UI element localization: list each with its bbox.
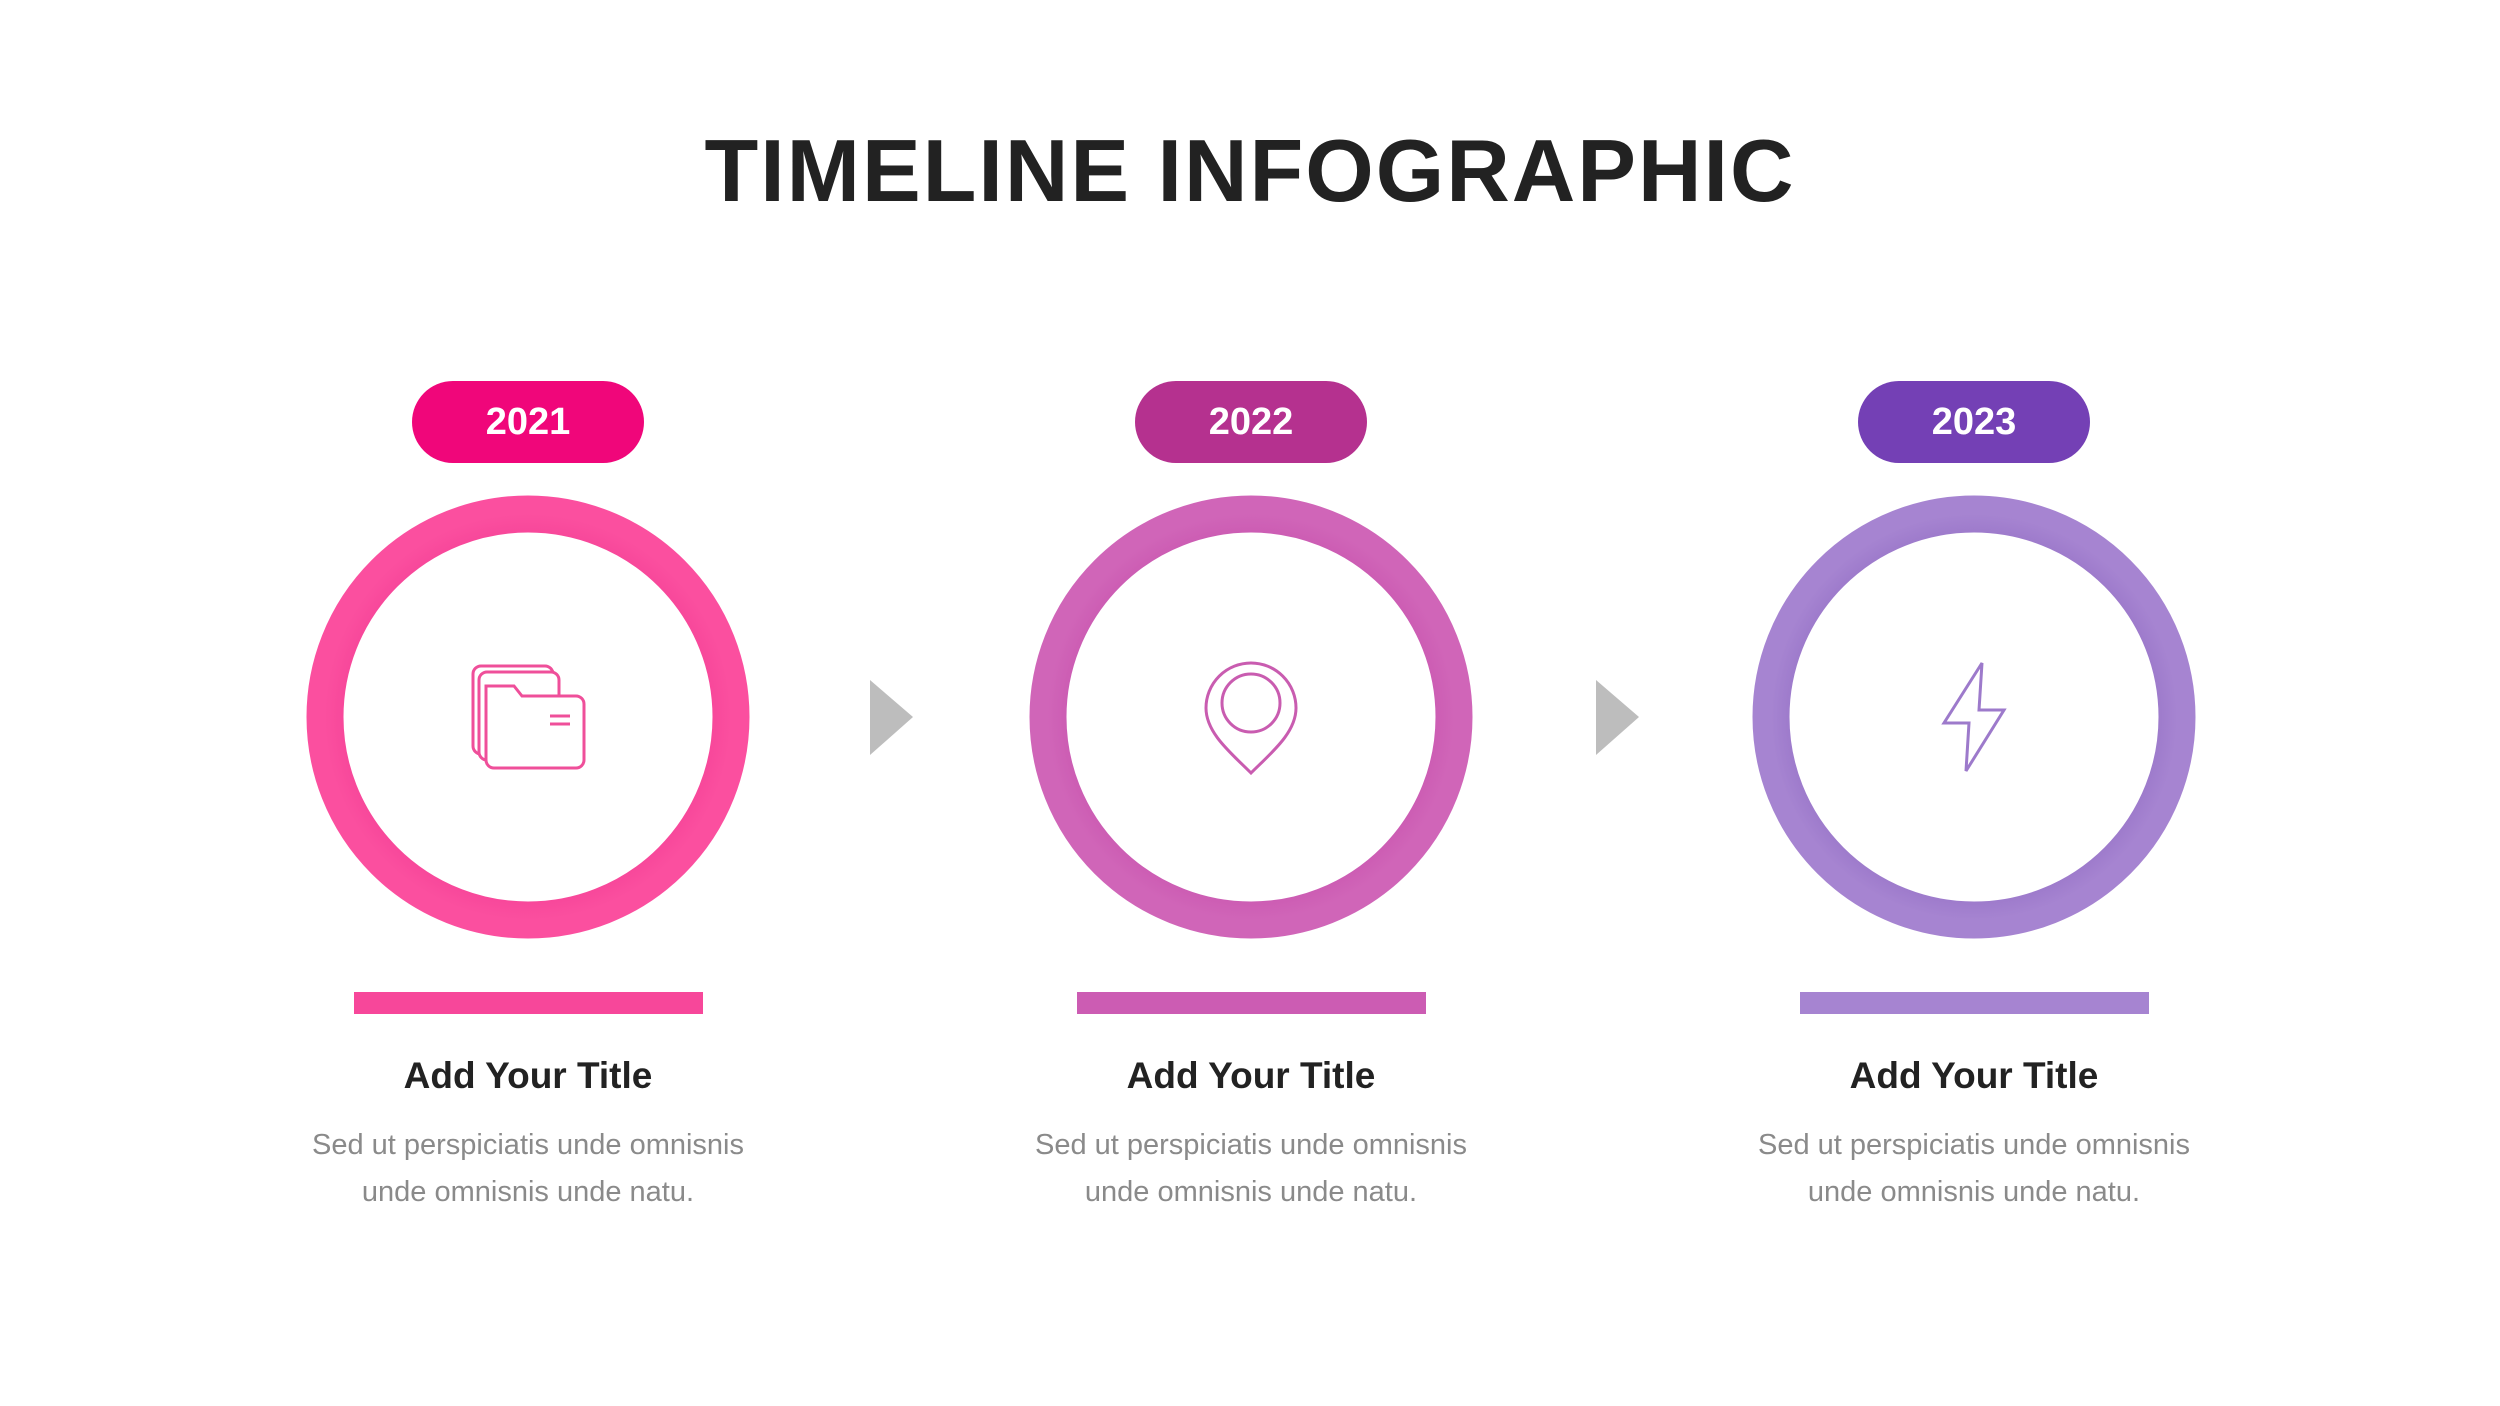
text 3: Sed ut perspiciatis unde omnisnis <box>1758 1129 2190 1161</box>
heading 1: Add Your Title <box>404 1055 652 1096</box>
pill: 2021 <box>412 381 644 463</box>
text 2 <box>1035 1129 1467 1208</box>
pill: 2023: 2023 <box>1932 401 2016 443</box>
text 3: unde omnisnis unde natu. <box>1808 1176 2140 1208</box>
bar 1 <box>354 992 703 1014</box>
circle: 2021 <box>325 514 731 920</box>
bar 2 <box>1077 992 1426 1014</box>
pill: 2022: 2022 <box>1209 401 1293 443</box>
pill: 2023 <box>1858 381 2090 463</box>
icon: location pin <box>1206 663 1296 773</box>
circle: 2022 <box>1048 514 1454 920</box>
bar 3 <box>1800 992 2149 1014</box>
heading 3: Add Your Title <box>1850 1055 2098 1096</box>
text 1: Sed ut perspiciatis unde omnisnis <box>312 1129 744 1161</box>
icon: lightning <box>1944 663 2004 771</box>
arrow 1 <box>870 680 913 755</box>
pill: 2022 <box>1135 381 1367 463</box>
title: TIMELINE INFOGRAPHIC <box>704 121 1796 220</box>
text 3 <box>1758 1129 2190 1208</box>
text 1 <box>312 1129 744 1208</box>
pill: 2021: 2021 <box>486 401 570 443</box>
text 1: unde omnisnis unde natu. <box>362 1176 694 1208</box>
icon: folder <box>473 666 584 768</box>
arrow 2 <box>1596 680 1639 755</box>
text 2: unde omnisnis unde natu. <box>1085 1176 1417 1208</box>
text 2: Sed ut perspiciatis unde omnisnis <box>1035 1129 1467 1161</box>
circle: 2023 <box>1771 514 2177 920</box>
heading 2: Add Your Title <box>1127 1055 1375 1096</box>
